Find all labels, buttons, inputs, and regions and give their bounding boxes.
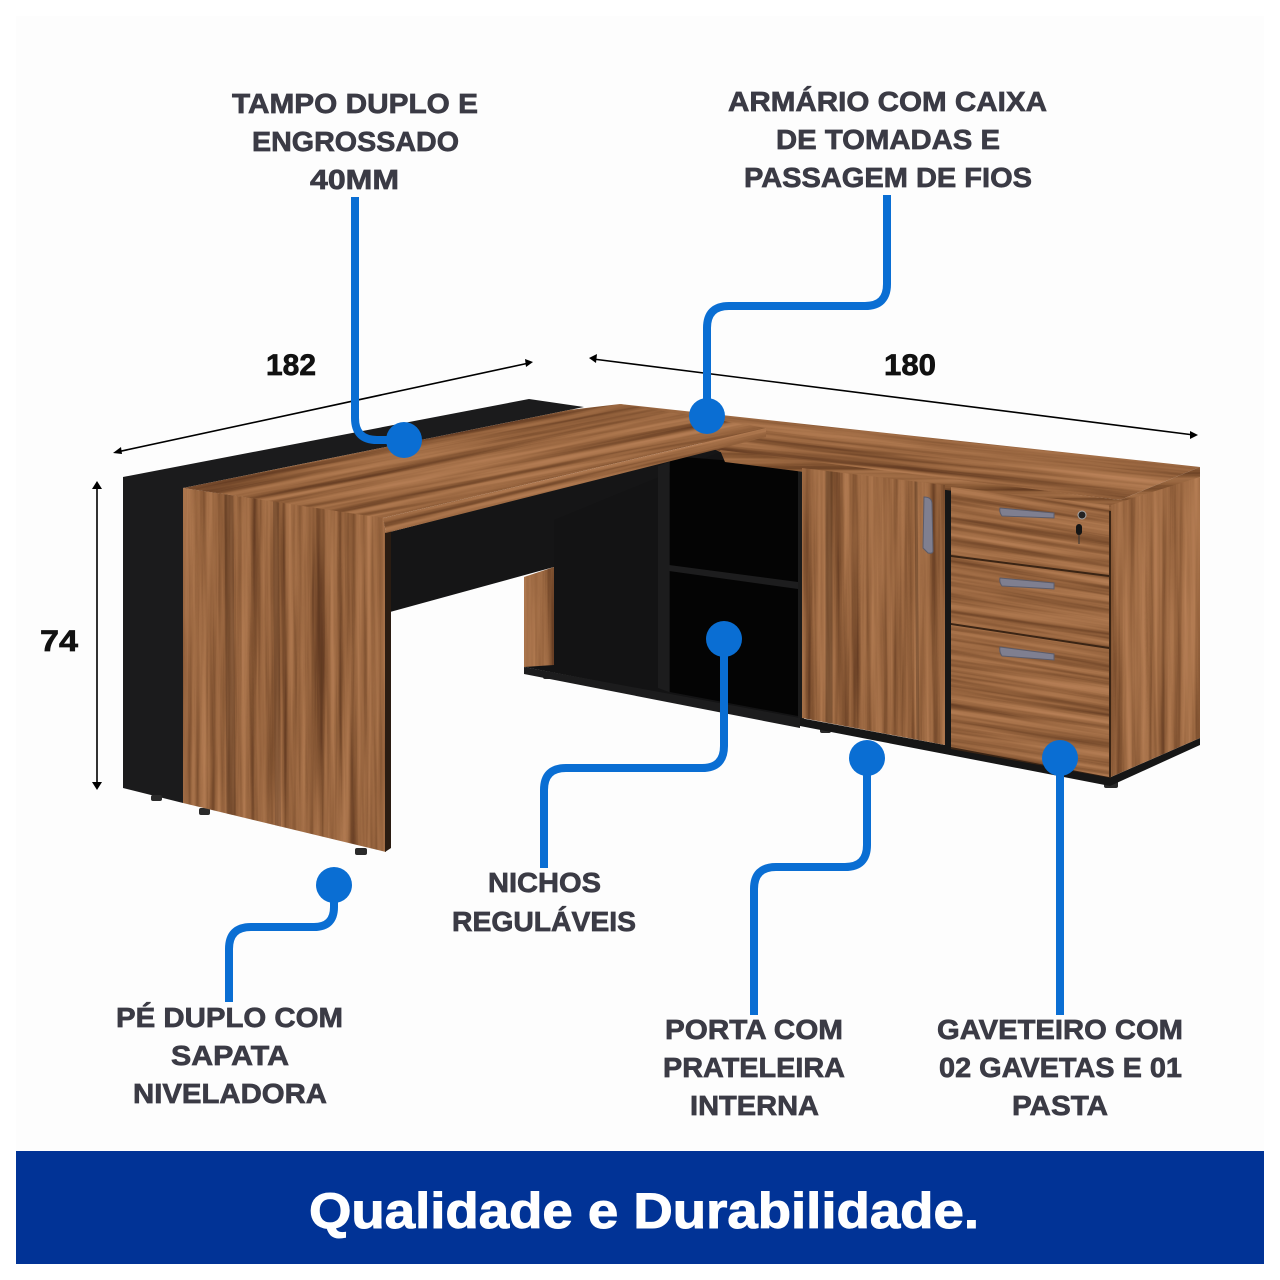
callout: nichos: NICHOS	[488, 867, 601, 898]
drawer 3	[951, 625, 1109, 777]
callout: nichos	[452, 621, 742, 937]
desk illustration	[123, 399, 1200, 855]
callout: gaveteiro: GAVETEIRO COM	[937, 1014, 1183, 1045]
cabinet top edge	[720, 450, 1200, 511]
callout: porta: INTERNA	[690, 1090, 819, 1121]
callout: porta	[663, 740, 885, 1121]
drawer handle 2	[1000, 578, 1054, 589]
footer banner: Qualidade e Durabilidade.	[309, 1183, 979, 1239]
callout: pe duplo	[116, 867, 352, 1109]
cabinet base	[800, 718, 1200, 786]
desktop surface	[184, 404, 765, 518]
dimension arrow: 180 width	[589, 354, 1198, 439]
callout: nichos: REGULÁVEIS	[452, 906, 636, 937]
modesty panel under desktop	[386, 445, 725, 612]
rear wood leg	[524, 567, 554, 667]
dimension arrow: 182 width	[113, 359, 533, 454]
drawer backing	[951, 487, 1111, 778]
drawer handle 3	[1000, 647, 1054, 660]
dimension arrow: 74 height	[92, 481, 102, 790]
callout: pe duplo: NIVELADORA	[133, 1078, 327, 1109]
drawer 1	[951, 487, 1109, 575]
callout: armario	[689, 86, 1047, 434]
callout: gaveteiro	[937, 740, 1183, 1121]
door	[802, 468, 945, 745]
drawer 2	[951, 557, 1109, 647]
wood leg panel	[180, 485, 390, 855]
drawer handle 1	[1000, 508, 1054, 518]
cabinet side panel	[1111, 477, 1200, 777]
callout: armario: ARMÁRIO COM CAIXA	[728, 86, 1047, 117]
callout: tampo duplo: TAMPO DUPLO E	[232, 88, 478, 119]
leg thin dark end	[385, 531, 391, 852]
dimension label 182: 182	[266, 349, 316, 382]
callout: tampo duplo	[232, 88, 478, 458]
callout: armario: DE TOMADAS E	[776, 124, 1000, 155]
callout: tampo duplo: 40MM	[310, 164, 399, 195]
desk black rear leg panel	[123, 399, 584, 803]
cabinet top surface	[620, 404, 1200, 500]
door handle	[923, 497, 933, 553]
dimension label 180: 180	[884, 349, 936, 382]
callout: pe duplo: SAPATA	[171, 1040, 289, 1071]
dimension label 74: 74	[40, 625, 78, 658]
callout: armario: PASSAGEM DE FIOS	[744, 162, 1032, 193]
open niches	[524, 450, 804, 728]
callout: porta: PORTA COM	[665, 1014, 843, 1045]
lock and key	[1076, 511, 1086, 544]
footer banner	[16, 1151, 1264, 1264]
black strip between door and drawers	[945, 480, 952, 752]
desk feet	[151, 672, 1118, 855]
callout: tampo duplo: ENGROSSADO	[252, 126, 459, 157]
callout: gaveteiro: 02 GAVETAS E 01	[939, 1052, 1182, 1083]
callout: pe duplo: PÉ DUPLO COM	[116, 1002, 343, 1033]
callout: porta: PRATELEIRA	[663, 1052, 845, 1083]
desktop edge	[383, 428, 766, 533]
callout: gaveteiro: PASTA	[1012, 1090, 1108, 1121]
